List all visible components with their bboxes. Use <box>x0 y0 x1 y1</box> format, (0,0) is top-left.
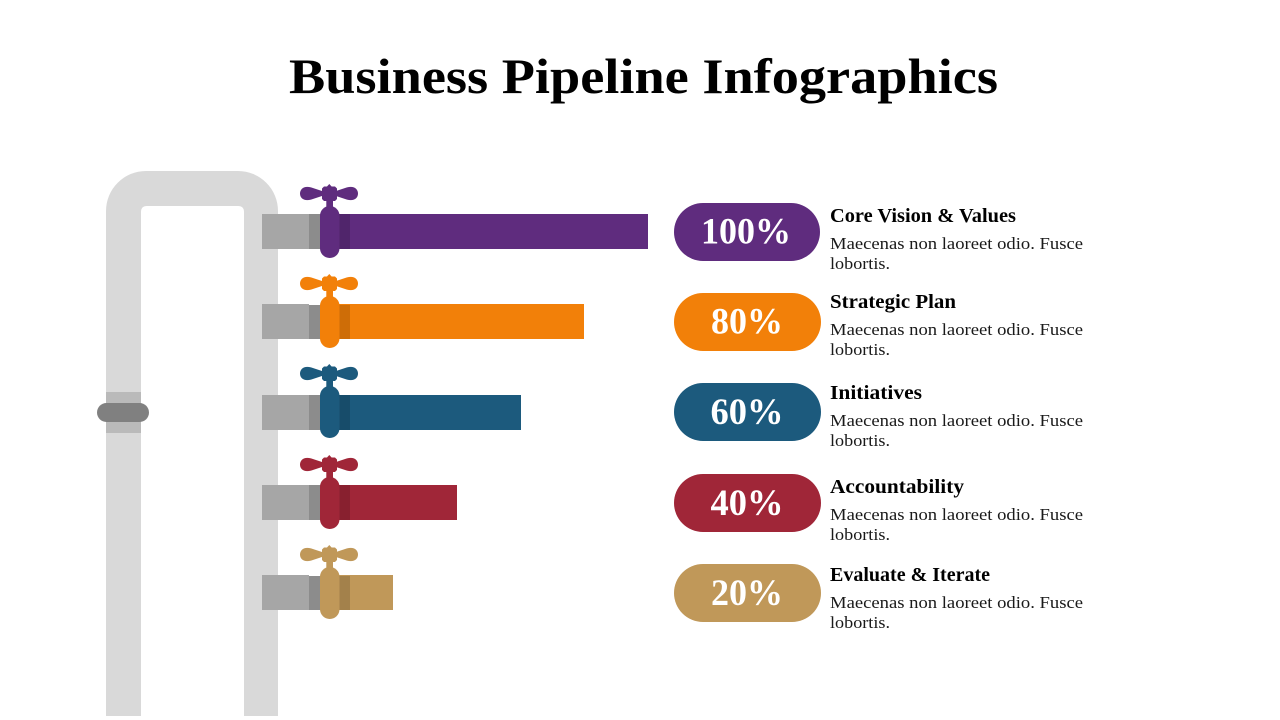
text block: Accountability: Maecenas non laoreet odio. Fusce <box>830 505 1083 524</box>
badge: 80%: 80% <box>711 302 783 342</box>
text block: Strategic Plan: lobortis. <box>830 340 890 359</box>
badge: 100% <box>674 203 820 261</box>
text block: Evaluate & Iterate: Maecenas non laoreet odio. Fusce <box>830 593 1083 612</box>
row 4: red bar and tap <box>262 455 457 529</box>
badge: 20% <box>674 564 821 622</box>
row 2: orange bar and tap <box>262 274 584 348</box>
pipeline: main grey pipe <box>106 171 278 716</box>
text block: Initiatives: lobortis. <box>830 431 890 450</box>
text block: Accountability: lobortis. <box>830 525 890 544</box>
title: Business Pipeline Infographics <box>289 48 998 104</box>
row 3: blue bar and tap <box>262 364 521 438</box>
text block: Initiatives <box>830 382 1083 450</box>
row 1: purple bar and tap <box>262 184 648 258</box>
text block: Core Vision & Values: lobortis. <box>830 254 890 273</box>
text block: Core Vision & Values: Core Vision & Values <box>830 205 1016 227</box>
badge: 40% <box>674 474 821 532</box>
row 5: tan bar and tap <box>262 545 393 619</box>
text block: Evaluate & Iterate <box>830 564 1083 632</box>
text block: Evaluate & Iterate: lobortis. <box>830 613 890 632</box>
badge: 100%: 100% <box>701 212 791 252</box>
badge: 60% <box>674 383 821 441</box>
text block: Initiatives: Initiatives <box>830 382 922 404</box>
text block: Accountability <box>830 476 1083 544</box>
text block: Accountability: Accountability <box>830 476 965 498</box>
badge: 40%: 40% <box>710 483 784 524</box>
text block: Evaluate & Iterate: Evaluate & Iterate <box>830 564 990 586</box>
text block: Core Vision & Values <box>830 205 1083 273</box>
text block: Core Vision & Values: Maecenas non laoreet odio. Fusce <box>830 234 1083 253</box>
badge: 20%: 20% <box>711 573 783 614</box>
text block: Strategic Plan: Strategic Plan <box>830 291 957 313</box>
text block: Strategic Plan <box>830 291 1083 359</box>
badge: 60%: 60% <box>710 392 784 433</box>
badge: 80% <box>674 293 821 351</box>
pipe clamp <box>97 392 149 433</box>
text block: Strategic Plan: Maecenas non laoreet odio. Fusce <box>830 320 1083 339</box>
text block: Initiatives: Maecenas non laoreet odio. Fusce <box>830 411 1083 430</box>
